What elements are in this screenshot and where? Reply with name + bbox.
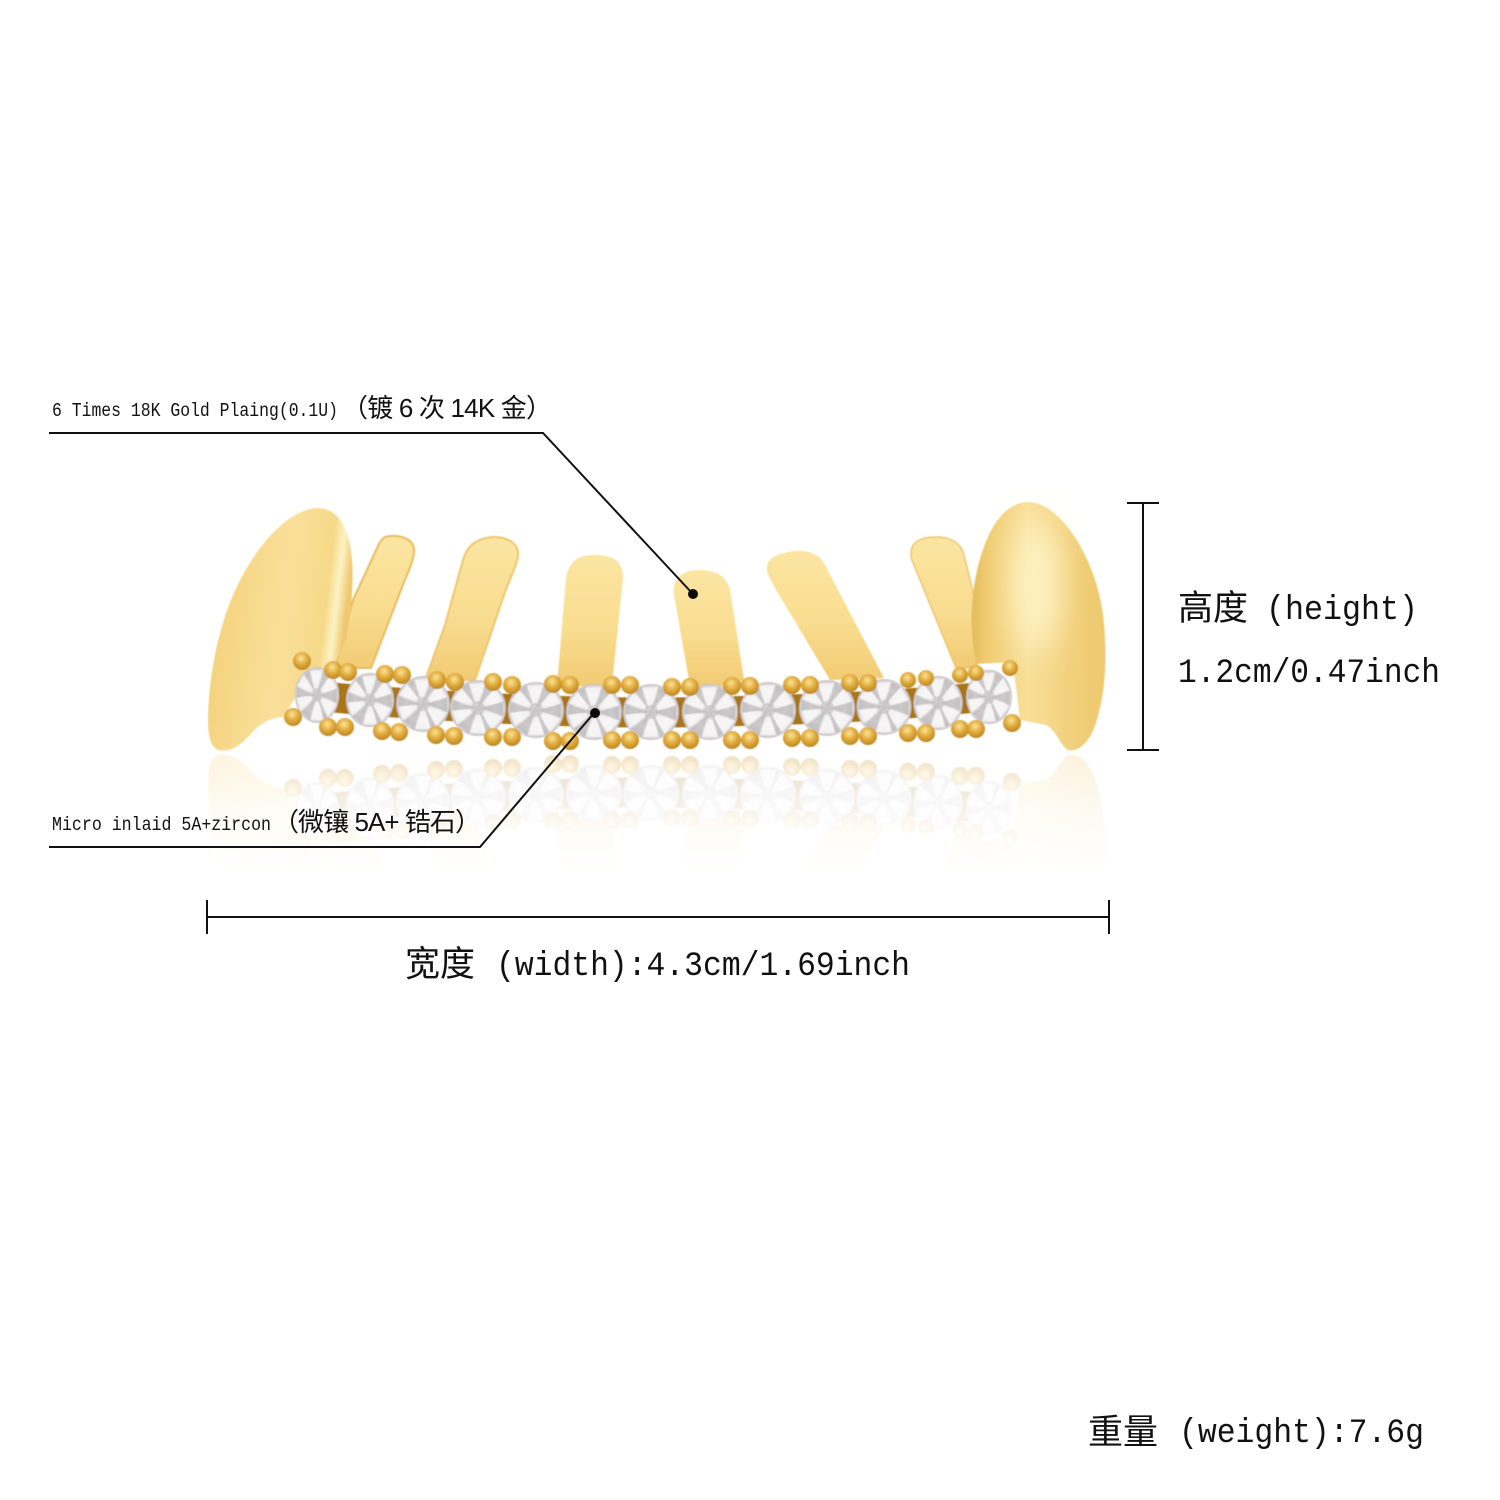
tab tooth 5: [767, 551, 884, 680]
left fang: [208, 508, 353, 750]
weight label: [1088, 1413, 1424, 1453]
plating label: 6 Times 18K Gold Plaing(0.1U): [52, 400, 338, 422]
zircon label: Micro inlaid 5A+zircon: [52, 814, 271, 836]
height label: [1178, 589, 1440, 693]
height dimension bracket: [1127, 503, 1159, 750]
gold grillz jewellery: [208, 502, 1105, 750]
width label: (width):4.3cm/1.69inch: [496, 948, 910, 986]
tab tooth 3: [557, 555, 623, 686]
weight label: 重量: [1088, 1413, 1158, 1452]
gold prongs top: [293, 652, 1018, 696]
tab tooth 1: [335, 536, 414, 668]
height label: 1.2cm/0.47inch: [1178, 655, 1440, 693]
plating marker dot: [688, 589, 698, 599]
plating label chinese: （镀 6 次 14K 金）: [342, 393, 552, 423]
width dimension bracket: [207, 900, 1109, 934]
tab tooth 6: [911, 537, 977, 668]
gold prongs bottom: [284, 708, 1021, 750]
zircon label chinese: （微镶 5A+ 锆石）: [273, 807, 481, 837]
tab tooth 4: [674, 570, 745, 686]
width label: 宽度: [405, 945, 475, 984]
infographic canvas: [49, 394, 1438, 1449]
faint mirrored reflection of the jewellery: [208, 754, 1104, 846]
tab tooth 2: [425, 537, 518, 680]
callout: zircon: [49, 708, 600, 847]
height label: 高度: [1178, 589, 1248, 628]
setting bar: [305, 695, 1000, 712]
zircon stones row: [295, 667, 1012, 740]
zircon leader line: [49, 713, 594, 847]
right fang: [972, 502, 1105, 750]
plating leader line: [49, 433, 692, 593]
zircon marker dot: [590, 708, 600, 718]
right fang highlight: [1014, 517, 1058, 653]
weight label: (weight):7.6g: [1179, 1415, 1424, 1453]
callout: gold plating: [49, 393, 698, 599]
height label: (height): [1266, 592, 1418, 630]
